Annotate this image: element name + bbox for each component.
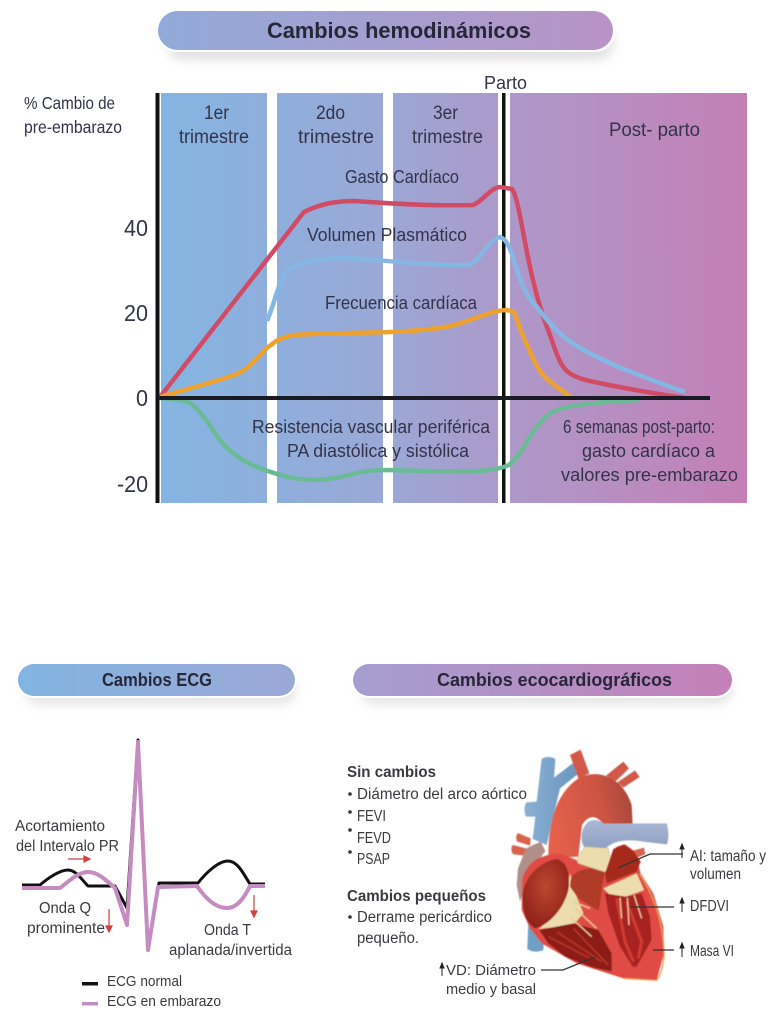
postpartum note: 6 semanas post-parto: bbox=[563, 416, 715, 437]
left atrium lower tissue bbox=[603, 873, 644, 897]
Cambios pequeños list: Cambios pequeños bbox=[347, 888, 486, 905]
label: T wave: aplanada/invertida bbox=[169, 942, 292, 959]
label: Q wave: Onda Q bbox=[39, 900, 91, 917]
leader lines bbox=[541, 854, 683, 970]
postpartum note bbox=[561, 416, 738, 485]
panel: hemodynamic chart bbox=[24, 72, 747, 503]
label: Q wave: prominente bbox=[27, 920, 105, 937]
Sin cambios list: FEVD bbox=[357, 830, 391, 847]
curve labels: Volumen Plasmático bbox=[307, 224, 467, 245]
label: Masa VI bbox=[680, 943, 734, 960]
Sin cambios list: Sin cambios bbox=[347, 764, 436, 781]
y axis tick labels: -20 bbox=[117, 471, 148, 497]
left ventricle cavity bbox=[605, 893, 652, 967]
label: Masa VI: Masa VI bbox=[690, 943, 734, 960]
Sin cambios list: PSAP bbox=[357, 851, 390, 868]
label: VD: VD: Diámetro bbox=[446, 962, 536, 979]
valve cream bbox=[577, 847, 611, 873]
arrow: Q wave down bbox=[106, 909, 112, 932]
label: Q wave bbox=[27, 900, 105, 937]
Sin cambios list bbox=[347, 764, 527, 868]
y axis tick labels: 0 bbox=[136, 385, 148, 411]
postpartum note: gasto cardíaco a bbox=[582, 440, 716, 461]
y axis title: pre-embarazo bbox=[24, 117, 122, 137]
label: AI: volumen bbox=[690, 866, 741, 883]
pulmonary artery bbox=[582, 820, 668, 849]
period labels: 1er bbox=[204, 103, 230, 124]
label: PR interval: del Intervalo PR bbox=[16, 838, 119, 855]
heading: Cambios ecocardiográficos: Cambios ecocardiográficos bbox=[437, 670, 672, 690]
curve labels bbox=[252, 166, 491, 461]
right ventricle cavity bbox=[539, 923, 612, 972]
y axis tick labels: 20 bbox=[124, 300, 148, 326]
label: PR interval: Acortamiento bbox=[15, 818, 105, 835]
Cambios pequeños list: pequeño. bbox=[357, 930, 419, 947]
aortic arch bbox=[548, 774, 633, 858]
curve labels: Gasto Cardíaco bbox=[345, 166, 459, 187]
trimester and postpartum bands bbox=[161, 93, 747, 503]
vena cava bbox=[525, 757, 579, 845]
label: PR interval bbox=[15, 818, 119, 855]
Cambios pequeños list: Derrame pericárdico bbox=[357, 909, 492, 926]
heading: Cambios ecocardiográficos bbox=[351, 662, 734, 704]
right atrium exterior bbox=[517, 842, 545, 902]
y axis tick labels bbox=[117, 215, 148, 497]
y axis title: % Cambio de bbox=[24, 93, 115, 113]
period labels: 3er bbox=[433, 103, 459, 124]
inferior vena cava bbox=[527, 922, 545, 952]
label: DFDVI: DFDVI bbox=[690, 898, 729, 915]
Sin cambios list: FEVI bbox=[357, 808, 386, 825]
Sin cambios list: Diámetro del arco aórtico bbox=[357, 786, 527, 803]
period labels: trimestre bbox=[179, 127, 249, 148]
heading: Cambios ECG bbox=[16, 662, 297, 704]
arrow: T wave down bbox=[251, 895, 257, 917]
label: VD bbox=[440, 962, 536, 998]
icon: heart anatomy bbox=[511, 750, 668, 980]
outer rim bbox=[623, 873, 664, 980]
heart body bbox=[522, 844, 664, 980]
curve: volumen plasmatico bbox=[267, 237, 685, 392]
curve: resistencia vascular periferica bbox=[160, 398, 640, 480]
y axis title bbox=[24, 93, 122, 137]
curve: gasto cardiaco bbox=[160, 187, 685, 398]
arrow: PR shortening bbox=[68, 856, 90, 862]
delivery marker: Parto bbox=[484, 72, 527, 93]
panel: ECG chart bbox=[15, 740, 292, 1010]
curve labels: PA diastólica y sistólica bbox=[287, 440, 470, 461]
heading: Cambios ECG: Cambios ECG bbox=[102, 670, 212, 690]
period labels: trimestre bbox=[412, 127, 483, 148]
legend bbox=[82, 973, 221, 1010]
y axis tick labels: 40 bbox=[124, 215, 148, 241]
curve labels: Resistencia vascular periférica bbox=[252, 416, 491, 437]
left atrium cavity bbox=[605, 844, 641, 883]
postpartum note: valores pre-embarazo bbox=[561, 464, 738, 485]
Cambios pequeños list bbox=[347, 888, 492, 947]
trace: ECG normal bbox=[22, 740, 265, 948]
label: AI bbox=[680, 844, 766, 883]
legend: ECG en embarazo bbox=[107, 993, 221, 1010]
heading: Cambios hemodinámicos bbox=[156, 9, 616, 60]
label: VD: medio y basal bbox=[446, 981, 536, 998]
curve: frecuencia cardiaca bbox=[160, 310, 571, 397]
curve labels: Frecuencia cardíaca bbox=[325, 292, 478, 313]
pulmonary veins bbox=[511, 833, 645, 858]
aortic root cavity bbox=[570, 868, 605, 911]
tissue cream bbox=[538, 873, 583, 929]
axes bbox=[156, 93, 710, 503]
period labels: Post- parto bbox=[609, 120, 700, 141]
period labels bbox=[179, 103, 700, 148]
heading: Cambios hemodinámicos: Cambios hemodinámicos bbox=[267, 18, 531, 43]
aortic branches bbox=[570, 750, 640, 788]
heart labels bbox=[440, 844, 766, 998]
legend: ECG normal bbox=[107, 973, 182, 990]
label: T wave: Onda T bbox=[204, 922, 251, 939]
delivery marker bbox=[484, 72, 527, 503]
label: DFDVI bbox=[680, 898, 729, 915]
label: T wave bbox=[169, 922, 292, 959]
period labels: trimestre bbox=[298, 127, 374, 148]
trace: ECG en embarazo bbox=[22, 742, 265, 950]
text block: echo findings bbox=[347, 764, 527, 947]
period labels: 2do bbox=[316, 103, 345, 124]
right atrium cavity bbox=[523, 859, 569, 928]
